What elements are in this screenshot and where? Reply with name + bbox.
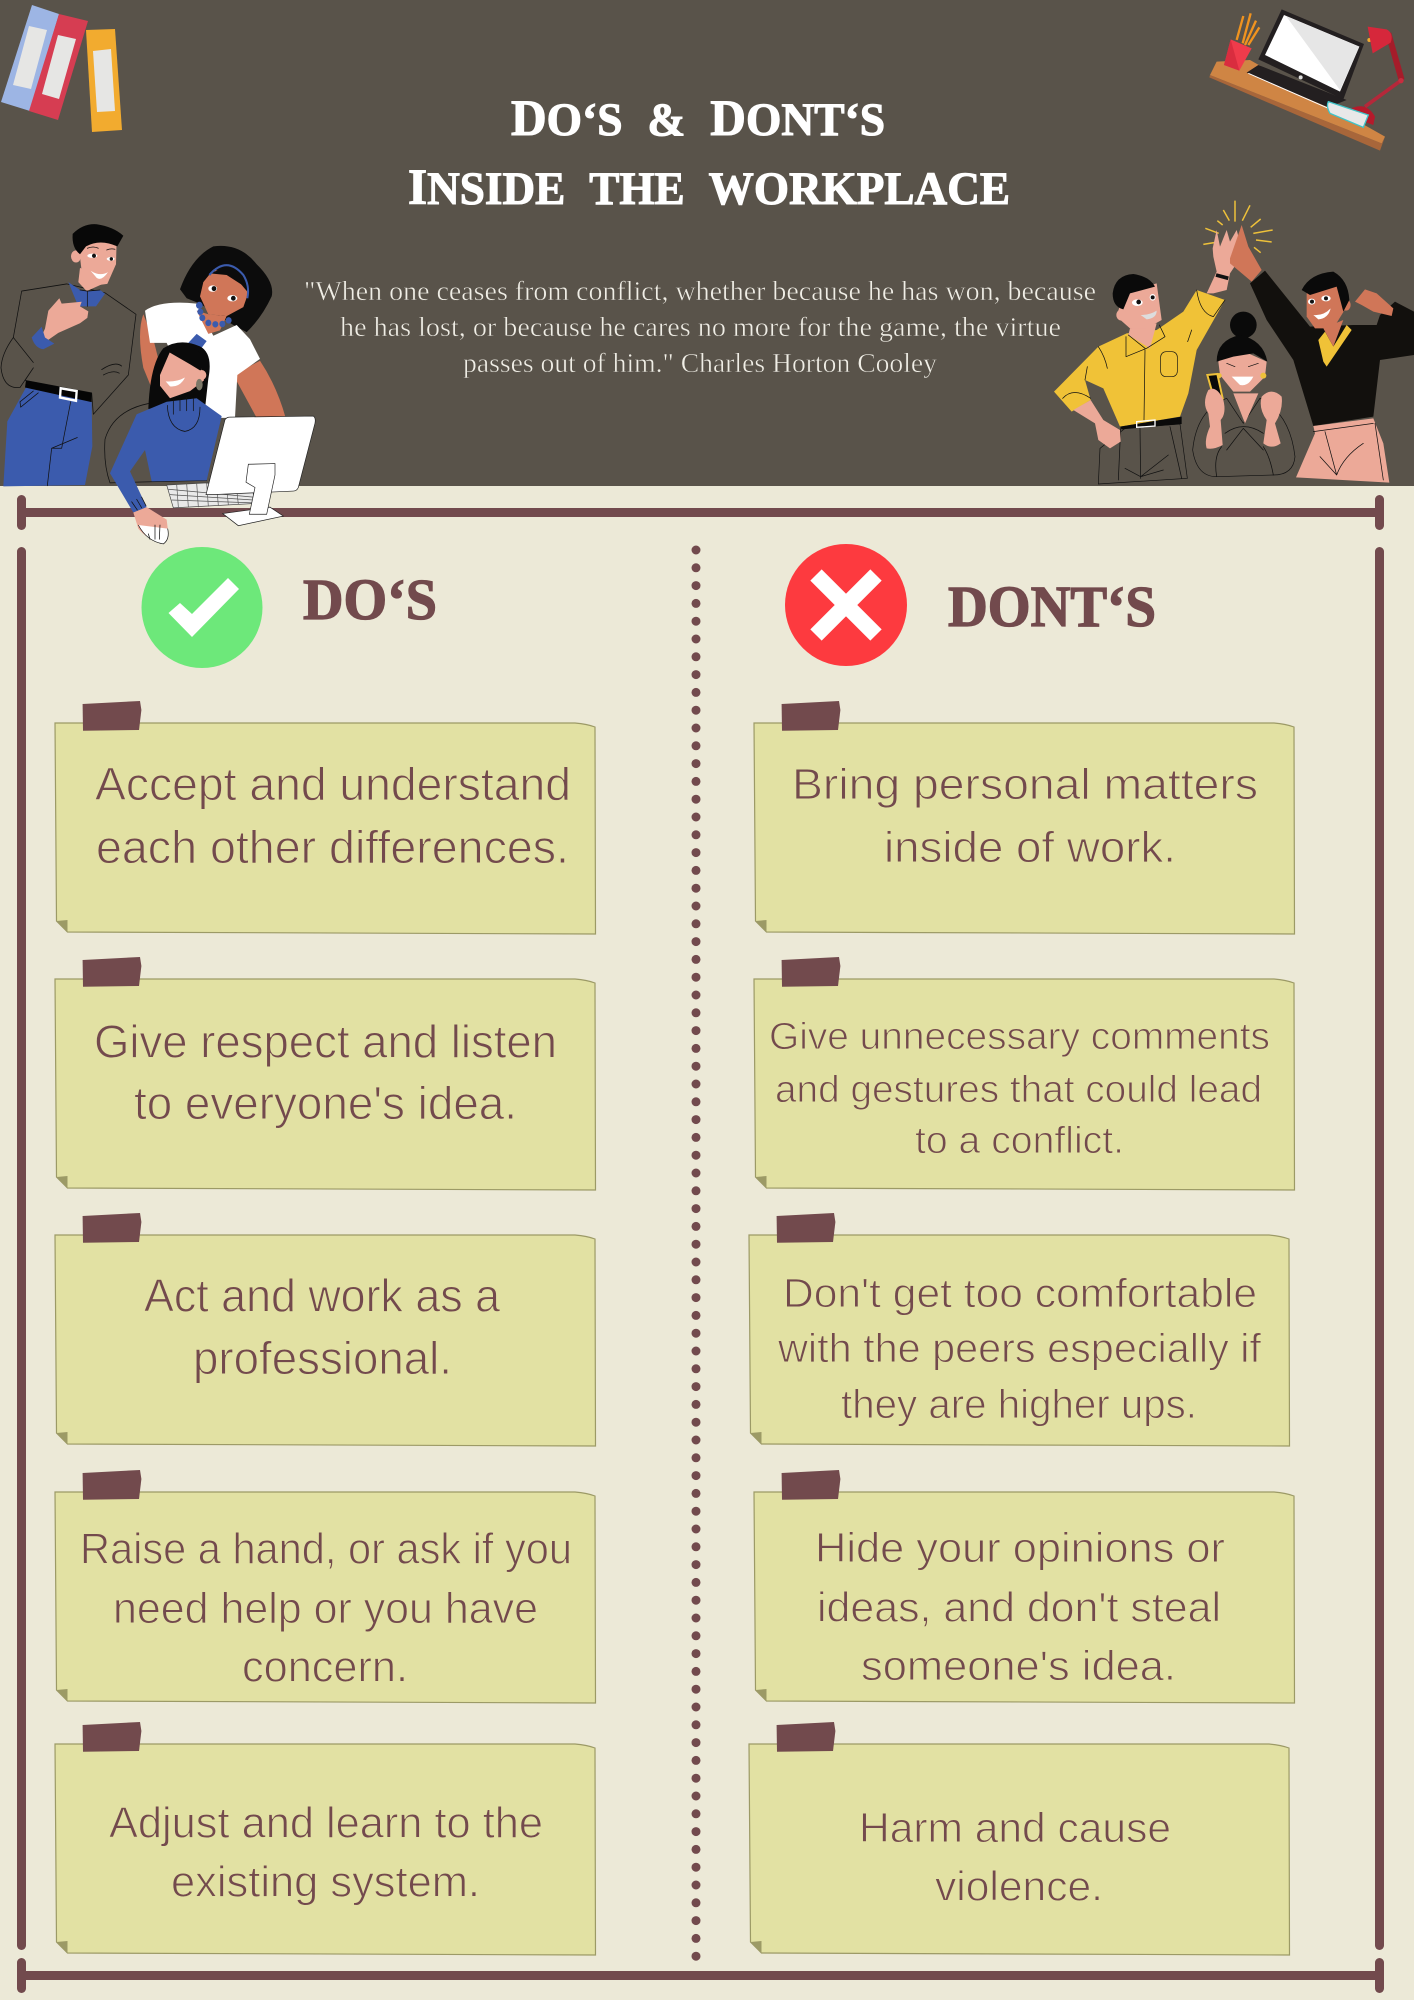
text: Don't get too comfortable	[783, 1270, 1257, 1316]
panel: do 1	[55, 701, 596, 934]
frame bars	[17, 495, 1384, 1993]
illustration: high-five team	[1054, 201, 1414, 484]
panel: do 4	[55, 1470, 596, 1703]
title: DO‘S & DONT‘S	[511, 91, 885, 147]
text	[859, 1804, 1171, 1910]
text	[792, 760, 1258, 872]
text: they are higher ups.	[841, 1381, 1197, 1427]
illustration: desk with laptop and lamp	[1209, 9, 1404, 151]
title	[408, 91, 1010, 216]
text	[815, 1524, 1225, 1689]
text: to a conflict.	[915, 1120, 1124, 1162]
text: Adjust and learn to the	[109, 1798, 543, 1848]
text: professional.	[193, 1332, 452, 1384]
quote	[304, 276, 1096, 378]
text: violence.	[935, 1862, 1103, 1910]
text: Hide your opinions or	[815, 1524, 1225, 1571]
text: to everyone's idea.	[134, 1077, 517, 1129]
text: concern.	[242, 1642, 408, 1692]
panel: dont 2	[754, 957, 1294, 1190]
text: existing system.	[171, 1858, 480, 1906]
quote: "When one ceases from conflict, whether because he has won, because	[304, 276, 1096, 306]
text: Harm and cause	[859, 1804, 1171, 1851]
text: Act and work as a	[144, 1270, 500, 1322]
text: ideas, and don't steal	[817, 1584, 1221, 1630]
header band	[0, 0, 1414, 486]
text: someone's idea.	[861, 1642, 1176, 1689]
text: Give unnecessary comments	[769, 1016, 1270, 1058]
title: INSIDE THE WORKPLACE	[408, 160, 1010, 216]
text: need help or you have	[113, 1584, 538, 1633]
text: each other differences.	[96, 821, 569, 873]
icon: binders	[1, 5, 122, 132]
icon: green check	[142, 547, 262, 668]
heading: dont's: DONT‘S	[948, 574, 1156, 639]
panel: dont 5	[749, 1722, 1290, 1955]
icon: sparkle	[1203, 201, 1273, 253]
text	[777, 1270, 1262, 1427]
panel: dont 4	[754, 1470, 1294, 1703]
text: Bring personal matters	[792, 760, 1258, 809]
text	[109, 1798, 543, 1906]
quote: he has lost, or because he cares no more for the game, the virtue	[340, 312, 1061, 342]
panel: dont 1	[754, 701, 1294, 934]
text	[80, 1524, 572, 1692]
quote: passes out of him." Charles Horton Cooley	[463, 348, 938, 378]
panel: do 2	[55, 957, 596, 1190]
icon: red cross	[785, 544, 907, 666]
panel: do 3	[55, 1213, 596, 1446]
panel: dont 3	[749, 1213, 1290, 1446]
text: Give respect and listen	[94, 1016, 557, 1068]
text: and gestures that could lead	[775, 1069, 1262, 1111]
text: with the peers especially if	[777, 1325, 1262, 1371]
text	[144, 1270, 500, 1384]
text	[94, 1016, 557, 1129]
text: inside of work.	[884, 823, 1176, 872]
heading: do's: DO‘S	[303, 567, 437, 632]
panel: do 5	[55, 1722, 596, 1955]
text: Raise a hand, or ask if you	[80, 1524, 572, 1574]
text: Accept and understand	[95, 758, 571, 810]
illustration: three colleagues at a computer	[1, 224, 315, 544]
text	[769, 1016, 1270, 1162]
text	[95, 758, 571, 873]
